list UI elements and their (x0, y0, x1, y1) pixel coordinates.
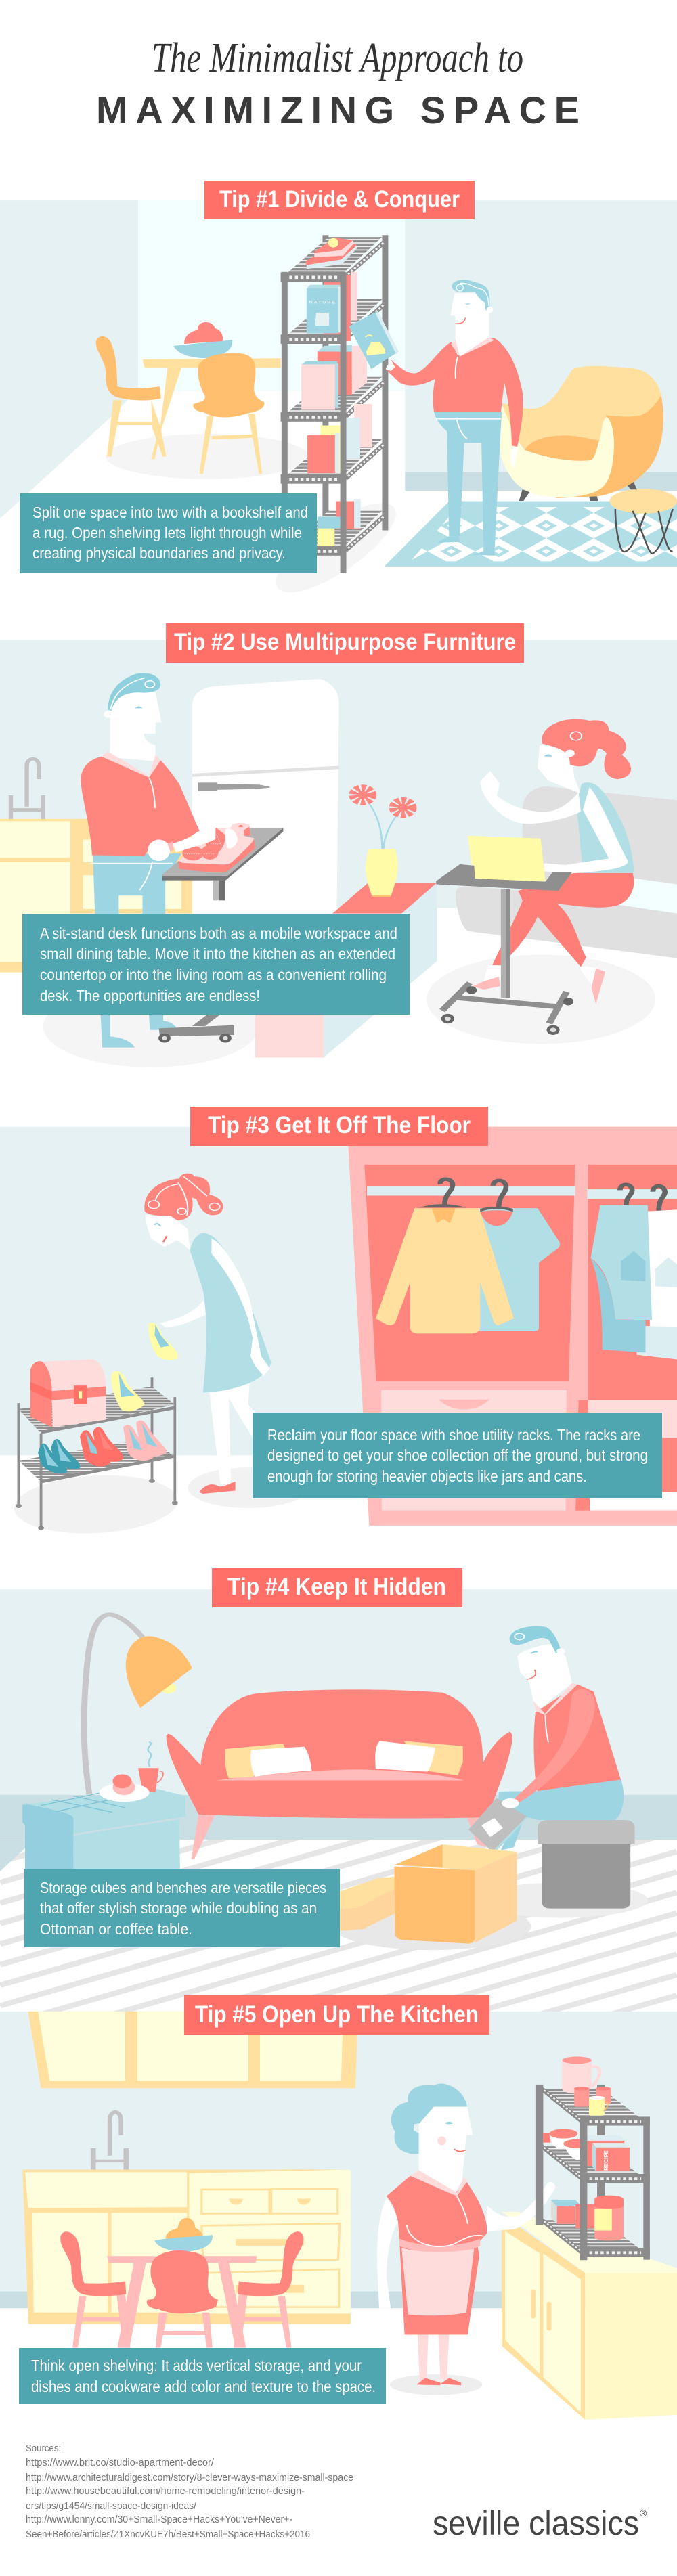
text block: tip 3: enough for storing heavier objects like jars and cans. (267, 1467, 587, 1485)
dining table and chairs (96, 322, 281, 474)
man cutting food (81, 673, 200, 1048)
text block: tip 2: A sit-stand desk functions both as a mobile workspace and (40, 925, 397, 942)
sources: Seen+Before/articles/Z1XncvKUE7h/Best+Small+Space+Hacks+2016 (26, 2529, 310, 2540)
sofa (456, 786, 677, 958)
man with book (349, 280, 523, 556)
text block: tip 2 (22, 914, 410, 1015)
text block: tip 2: countertop or into the living room as a convenient rolling (40, 966, 387, 983)
sources: https://www.brit.co/studio-apartment-decor/ (26, 2458, 215, 2468)
logo: seville classics: seville classics (433, 2504, 639, 2542)
dining set (60, 2218, 303, 2348)
text block: tip 4: Ottoman or coffee table. (40, 1920, 192, 1938)
upper cabinets (28, 2012, 358, 2088)
sources: ers/tips/g1454/small-space-design-ideas/ (26, 2501, 197, 2512)
panel: tip 3 illustration (0, 1127, 677, 1538)
faucet (93, 2112, 126, 2169)
storage ottoman with snack (22, 1742, 185, 1869)
tip 1 label: Tip #1 Divide & Conquer (219, 186, 460, 213)
text block: tip 2: small dining table. Move it into the kitchen as an extended (40, 945, 395, 962)
text block: tip 4: Storage cubes and benches are versatile pieces (40, 1879, 326, 1896)
text block: tip 4: that offer stylish storage while doubling as an (40, 1899, 317, 1917)
counter on right (502, 2212, 677, 2420)
sources: http://www.housebeautiful.com/home-remodeling/interior-design- (26, 2486, 305, 2497)
armchair (500, 366, 663, 501)
text block: tip 2: desk. The opportunities are endless! (40, 987, 260, 1004)
sources: http://www.lonny.com/30+Small-Space+Hacks+You've+Never+- (26, 2514, 292, 2525)
sit-stand desk with cutting board (162, 823, 283, 900)
woman holding shoe (144, 1174, 309, 1508)
title line: bold: MAXIMIZING SPACE (96, 89, 580, 131)
kitchen counter (0, 819, 192, 973)
desk base (148, 840, 234, 1042)
text block: tip 5: dishes and cookware add color and texture to the space. (31, 2378, 376, 2395)
text block: tip 3 (253, 1413, 662, 1498)
rug (385, 501, 677, 567)
text block: tip 5 (19, 2348, 386, 2404)
title line: script: The Minimalist Approach to (152, 35, 523, 81)
tip 4 label: Tip #4 Keep It Hidden (227, 1574, 446, 1600)
panel: tip 5 illustration (0, 2012, 677, 2420)
woman in apron (377, 2084, 555, 2395)
book label: nature: NATURE (309, 301, 336, 305)
sources: http://www.architecturaldigest.com/story/8-clever-ways-maximize-small-space (26, 2472, 353, 2483)
text block: tip 1: Split one space into two with a bookshelf and (32, 504, 308, 521)
bookshelf (281, 235, 388, 573)
panel: tip 2 illustration (0, 640, 677, 1067)
closet (347, 1127, 677, 1526)
book label: recipe: RECIPE (603, 2150, 609, 2171)
tip 2 label (166, 623, 524, 663)
striped floor (0, 1840, 677, 2012)
tip 5 label (184, 1995, 489, 2035)
tip 1 label (204, 181, 475, 219)
panel: tip 1 illustration (0, 200, 677, 607)
text block: tip 5: Think open shelving: It adds vertical storage, and your (31, 2357, 362, 2374)
floor lamp (84, 1614, 192, 1794)
side table with vase (255, 789, 437, 1057)
tip 5 label: Tip #5 Open Up The Kitchen (195, 2001, 479, 2028)
stool (610, 489, 677, 554)
text block: tip 4 (24, 1869, 340, 1947)
kitchen shelf (536, 2056, 650, 2260)
lower cabinets (22, 2169, 351, 2324)
tip 3 label: Tip #3 Get It Off The Floor (208, 1112, 471, 1138)
tip 2 label: Tip #2 Use Multipurpose Furniture (174, 629, 516, 655)
shoe rack (11, 1359, 181, 1538)
open storage box and lid (340, 1844, 517, 1944)
sofa (167, 1689, 512, 1859)
refrigerator (192, 679, 339, 915)
sources (26, 2443, 353, 2540)
logo: seville classics: ® (640, 2508, 647, 2518)
text block: tip 1: a rug. Open shelving lets light through while (32, 524, 302, 541)
sink faucet (11, 759, 43, 819)
tip 4 label (212, 1568, 462, 1607)
seated man with book (332, 1626, 648, 1950)
text block: tip 1 (20, 493, 317, 573)
sources: Sources: (26, 2443, 61, 2454)
tip 3 label (190, 1107, 488, 1146)
woman at laptop (436, 719, 634, 1035)
panel: tip 4 illustration (0, 1589, 677, 2012)
text block: tip 1: creating physical boundaries and privacy. (32, 544, 286, 562)
title (96, 35, 580, 131)
